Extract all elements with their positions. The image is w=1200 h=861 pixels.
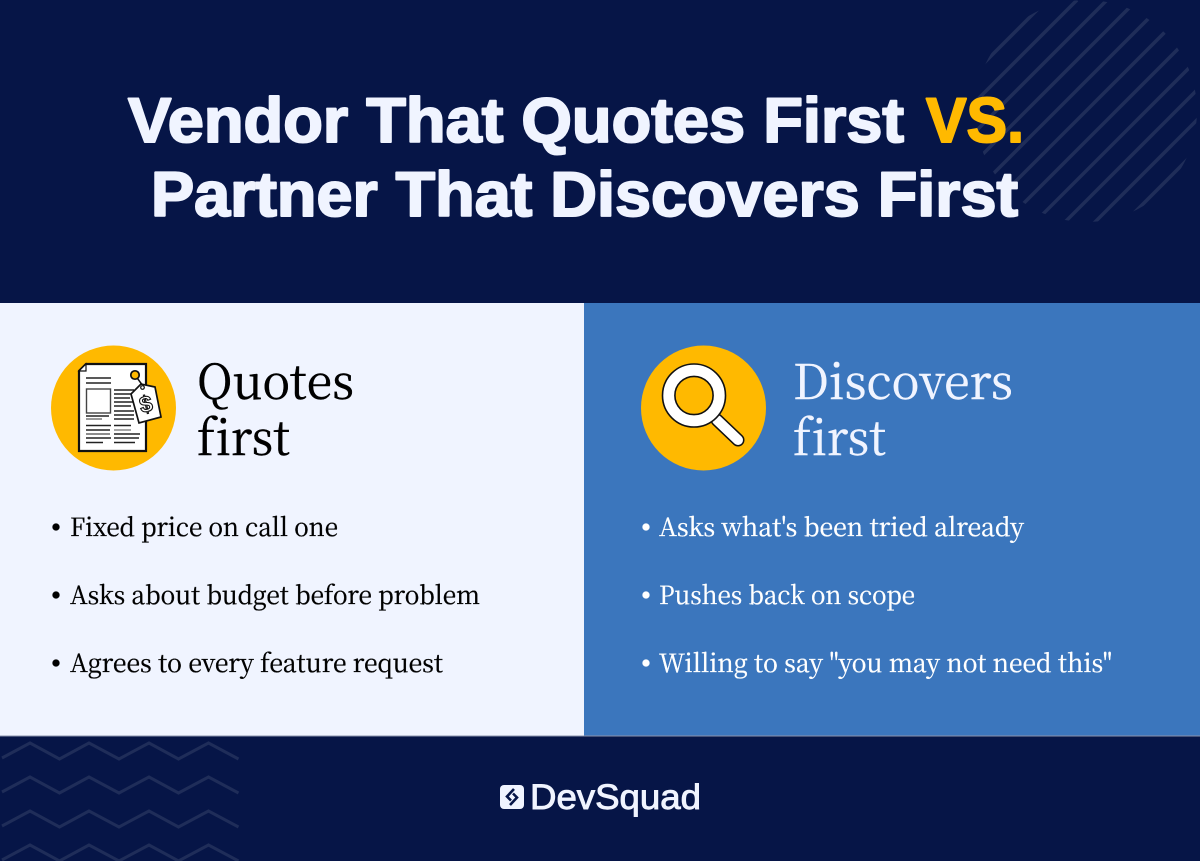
icon: magnifying glass (641, 346, 766, 470)
heading: quotes first (197, 344, 354, 469)
title: VS. (926, 86, 1024, 156)
heading: discovers first: Discovers (793, 344, 1013, 413)
list: quotes first points: Agrees to every feature request (70, 644, 443, 680)
list: discovers first points: Willing to say "you may not need this" (659, 644, 1112, 680)
panel: quotes first (0, 303, 584, 736)
logo: DevSquad: DevSquad (530, 778, 701, 817)
heading: discovers first (793, 344, 1013, 469)
panel: discovers first (584, 303, 1200, 736)
footer band (0, 736, 1200, 861)
list: quotes first points: Asks about budget before problem (70, 576, 480, 612)
heading: discovers first: first (793, 400, 886, 469)
list: discovers first points (642, 508, 1112, 680)
list: quotes first points (52, 508, 480, 680)
list: quotes first points: Fixed price on call one (70, 508, 338, 544)
list: discovers first points: Pushes back on scope (659, 576, 915, 612)
title: Partner That Discovers First (151, 160, 1018, 230)
icon: document with price tag (51, 346, 176, 470)
heading: quotes first: Quotes (197, 344, 354, 413)
header band (976, 0, 1197, 222)
title: Vendor That Quotes First (128, 86, 904, 156)
title (128, 86, 1024, 230)
icon: document with price tag: $ (137, 390, 155, 418)
list: discovers first points: Asks what's been tried already (659, 508, 1024, 544)
heading: quotes first: first (197, 400, 290, 469)
